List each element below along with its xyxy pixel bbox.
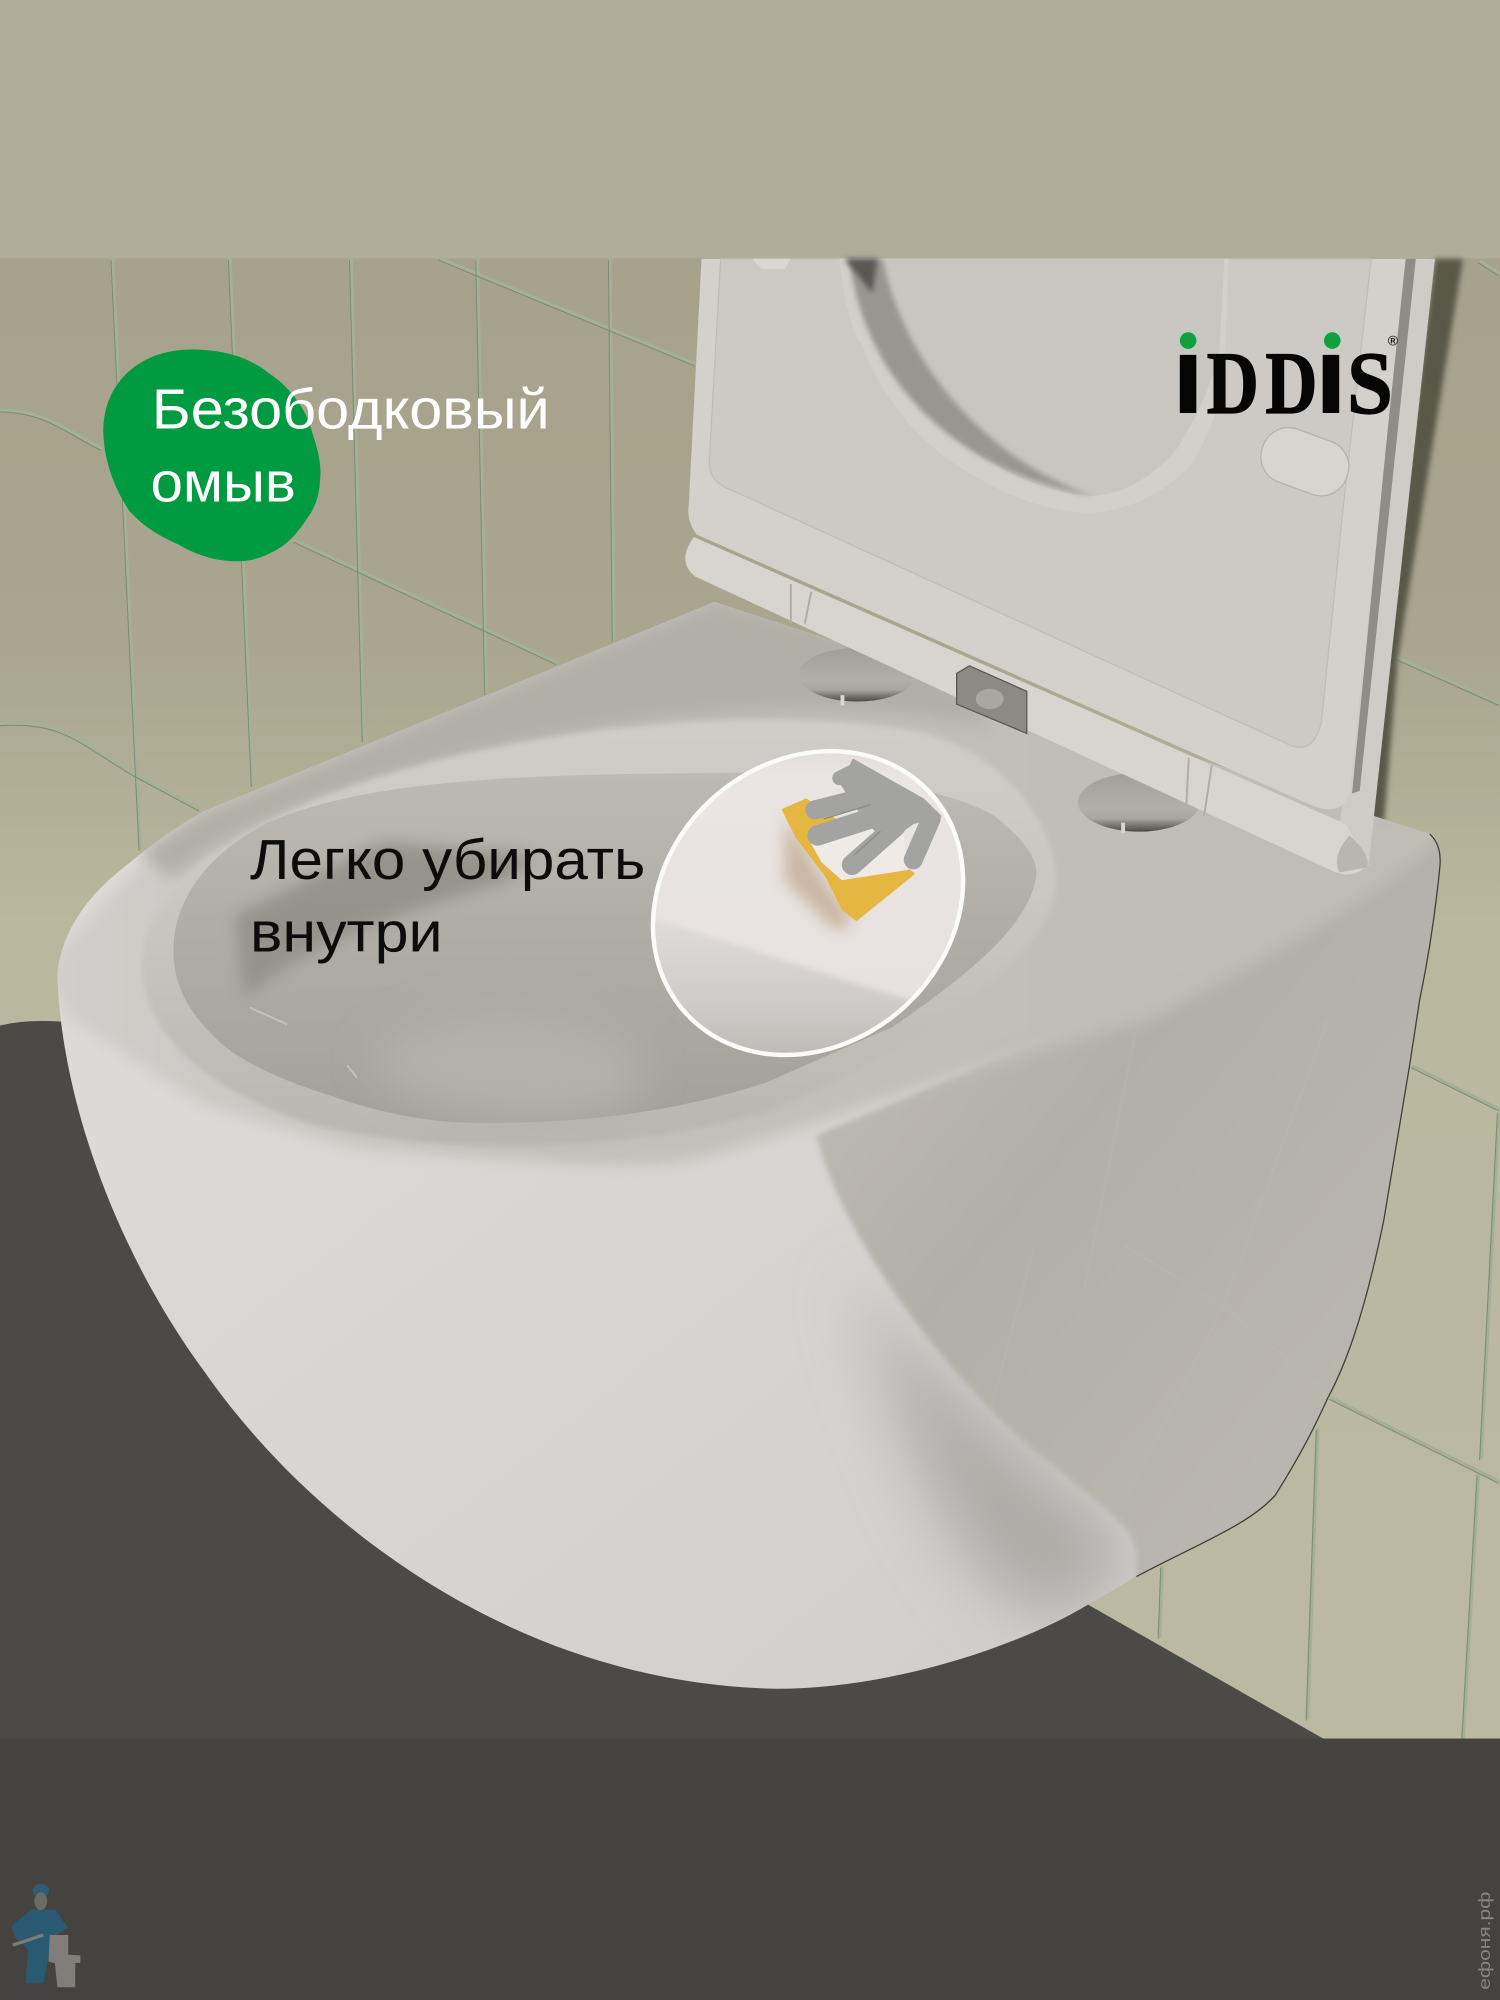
bottom dark band [0,1739,1500,2000]
back surface [140,602,995,880]
foam [810,834,908,880]
raised ring around opening [839,259,1228,513]
dark back wall of well [235,842,536,997]
caption: easy to clean inside [250,828,645,964]
IDDIS logo: D [1207,334,1259,433]
heading: rimless flush [151,378,550,513]
top background band [0,0,1500,259]
IDDIS logo: I [1172,337,1204,431]
seat inner panel [709,259,1371,747]
seat opening [872,259,1224,496]
lid shadow on wall [1365,259,1463,823]
side wall [816,816,1467,1594]
gloved hand [815,760,940,865]
sponge shadow [784,816,855,931]
rim top surface [38,587,1448,1166]
chrome seat clip [957,666,1027,733]
floor [0,1021,1325,1740]
toilet seat and lid [688,259,1435,865]
top hinge bump [753,259,791,269]
caption: easy to clean inside: внутри [250,901,443,964]
heading: rimless flush: омыв [151,450,296,513]
IDDIS logo [1172,332,1399,433]
IDDIS logo: D [1265,334,1318,433]
bowl rim crest [142,720,1056,1145]
toilet body [38,587,1467,1689]
IDDIS logo: ® [1388,333,1399,349]
bowl well [173,773,1036,1123]
chrome mount left [798,648,916,705]
reflected tile lines [982,1020,1328,1505]
IDDIS logo: S [1347,334,1393,433]
callout circle [650,749,966,1058]
lower wedge [656,922,909,1053]
heading: rimless flush: Безободковый [152,378,550,441]
caption: easy to clean inside: Легко убирать [250,828,645,891]
chrome mount right [1078,773,1200,833]
seat bumper [1253,420,1356,503]
opening inner shadow [849,259,1094,496]
green badge blob [103,349,320,561]
watermark: ефоня.рф [1475,1892,1494,1990]
hinge bar [685,537,1369,874]
inner water highlight [370,1011,645,1120]
sponge [783,800,913,920]
shading towards bowl tip [855,1276,1135,1615]
IDDIS logo: I [1315,337,1347,431]
plumber mascot icon [11,1884,80,1987]
silhouette edge [1136,834,1440,1577]
tiled wall [0,259,1500,1740]
water glints [250,1008,357,1078]
